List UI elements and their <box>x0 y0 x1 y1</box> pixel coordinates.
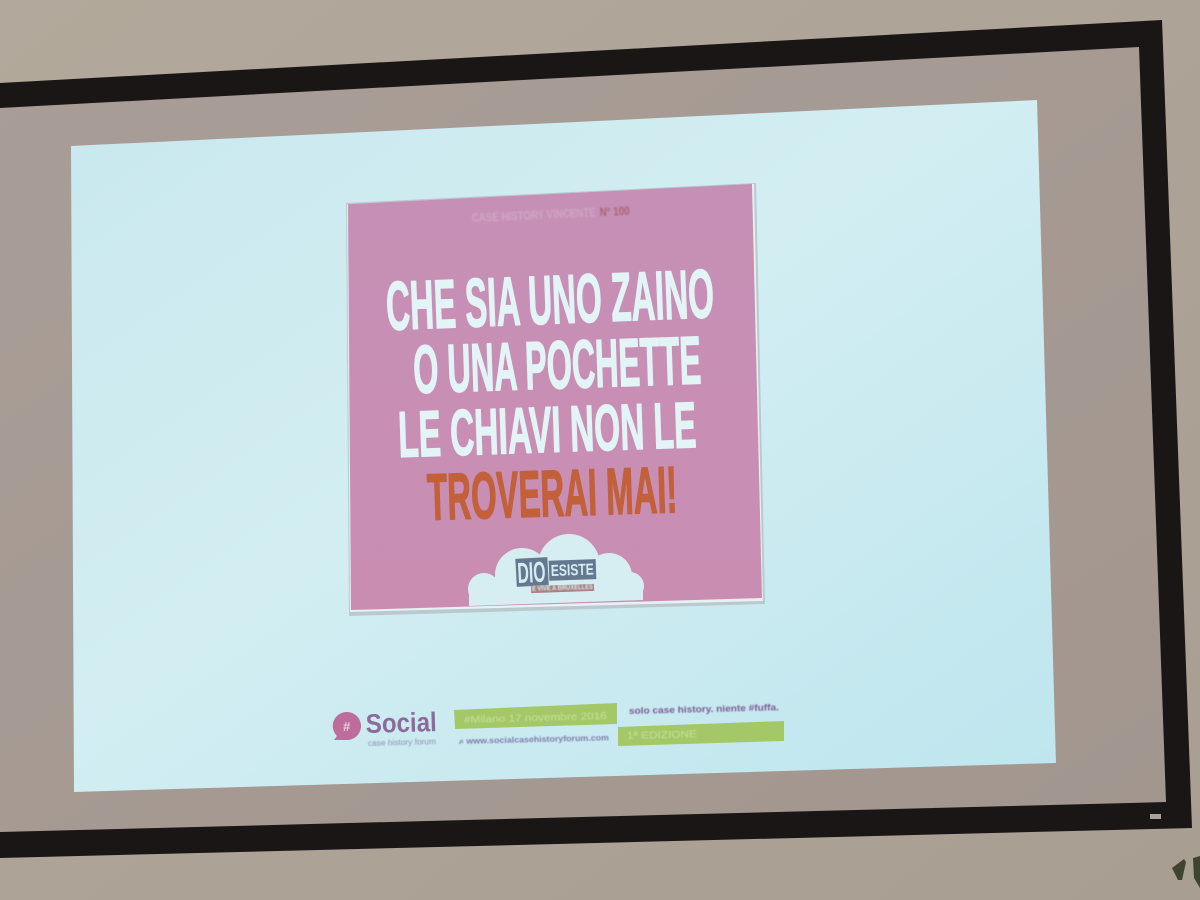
logo ESISTE <box>549 559 596 581</box>
cloud shape <box>468 534 644 606</box>
slide background <box>71 100 1056 792</box>
green date bar <box>454 703 617 729</box>
speech bubble icon <box>333 712 361 740</box>
pink card: CHE SIA UNO ZAINO <box>385 255 715 345</box>
wordmark subtitle: case history forum <box>368 737 436 748</box>
cloud logo: ESISTE <box>551 561 594 580</box>
pink card <box>346 183 765 616</box>
cloud logo: E VIVE A BRUXELLES <box>532 584 593 593</box>
card light edge <box>347 184 763 612</box>
green date bar: #Milano 17 novembre 2016 <box>464 711 608 726</box>
card shadow edge <box>346 183 765 616</box>
wordmark Social: Social <box>365 707 437 739</box>
frame logo badge <box>1150 814 1161 819</box>
card small header: N° 100 <box>599 204 630 219</box>
headline <box>385 255 715 534</box>
plant leaves <box>1172 856 1200 888</box>
footer <box>333 702 784 748</box>
projected slide <box>71 100 1056 792</box>
website url: ⌕ www.socialcasehistoryforum.com <box>458 733 609 746</box>
headline line 3: LE CHIAVI NON LE <box>397 388 697 471</box>
cloud logo: DIO <box>517 557 546 590</box>
card panel <box>348 184 762 610</box>
green edition bar <box>618 721 784 746</box>
Social logo: # <box>343 719 351 734</box>
green edition bar: 1ª EDIZIONE <box>627 729 697 742</box>
Social logo <box>333 707 437 748</box>
logo tagline <box>531 584 594 593</box>
card small header: CASE HISTORY VINCENTE <box>472 205 596 225</box>
cloud logo <box>468 534 644 606</box>
logo DIO <box>515 557 549 587</box>
headline: TROVERAI MAI! <box>426 452 678 534</box>
tagline: solo case history. niente #fuffa. <box>629 702 779 716</box>
pink card: O UNA POCHETTE <box>412 322 702 408</box>
